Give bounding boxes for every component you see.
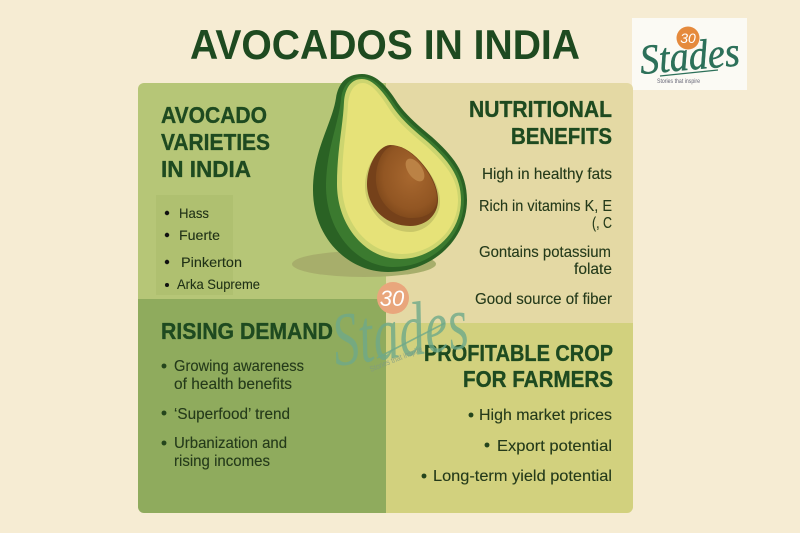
farmers list: Long-term yield potential: [433, 468, 612, 485]
watermark: 30 Stades: Stories that inspire: [368, 344, 424, 374]
farmers list: Export potential: [497, 438, 612, 455]
demand list: of health benefits: [174, 376, 292, 393]
farmers list: High market prices: [479, 407, 612, 424]
heading: profitable crop: [425, 344, 612, 388]
benefits list: [475, 166, 613, 308]
heading: nutritional benefits: BENEFITS: [511, 123, 612, 149]
demand list: Urbanization and: [174, 435, 287, 452]
infographic card: [138, 83, 633, 513]
varieties list: Arka Supreme: [177, 276, 260, 292]
title: AVOCADOS IN INDIA: [190, 21, 580, 68]
benefits list: Gontains potassium: [479, 244, 611, 261]
panel: rising demand: [138, 299, 386, 513]
watermark: 30 Stades: 30: [380, 286, 405, 311]
heading: varieties: VARIETIES: [161, 129, 270, 155]
benefits list: folate: [574, 261, 612, 278]
icon: avocado half: [292, 74, 467, 277]
farmers list: [422, 407, 612, 485]
heading: rising demand: RISING DEMAND: [161, 318, 333, 344]
varieties list backdrop: [156, 195, 233, 295]
varieties list: Hass: [179, 205, 209, 221]
panel: nutritional benefits: [386, 83, 633, 323]
varieties list: Fuerte: [179, 227, 220, 243]
heading: varieties: IN INDIA: [161, 156, 251, 182]
logo: 30 Stades: 30: [680, 30, 696, 46]
benefits list: Good source of fiber: [475, 291, 613, 308]
watermark: 30 Stades: Stades: [327, 281, 473, 383]
benefits list: (, C: [592, 215, 612, 232]
heading: nutritional benefits: NUTRITIONAL: [469, 96, 612, 122]
watermark: 30 Stades: [327, 281, 473, 383]
panel: avocado varieties: [138, 83, 386, 300]
benefits list: High in healthy fats: [482, 166, 612, 183]
logo: 30 Stades: Stades: [638, 29, 741, 84]
heading: varieties: AVOCADO: [161, 102, 267, 128]
avocado pit: [365, 145, 440, 232]
heading: varieties: [161, 106, 270, 178]
demand list: [162, 358, 304, 470]
panel: profitable crop: [386, 323, 633, 513]
heading: nutritional benefits: [470, 100, 612, 144]
heading: profitable crop: PROFITABLE CROP: [424, 340, 613, 366]
benefits list: Rich in vitamins K, E: [479, 198, 612, 215]
varieties list: Pinkerton: [181, 254, 242, 270]
logo: 30 Stades: Stories that inspire: [657, 79, 701, 85]
demand list: rising incomes: [174, 453, 270, 470]
demand list: Growing awareness: [174, 358, 304, 375]
demand list: ‘Superfood’ trend: [174, 406, 290, 423]
heading: profitable crop: FOR FARMERS: [463, 366, 613, 392]
varieties list: [165, 205, 260, 292]
